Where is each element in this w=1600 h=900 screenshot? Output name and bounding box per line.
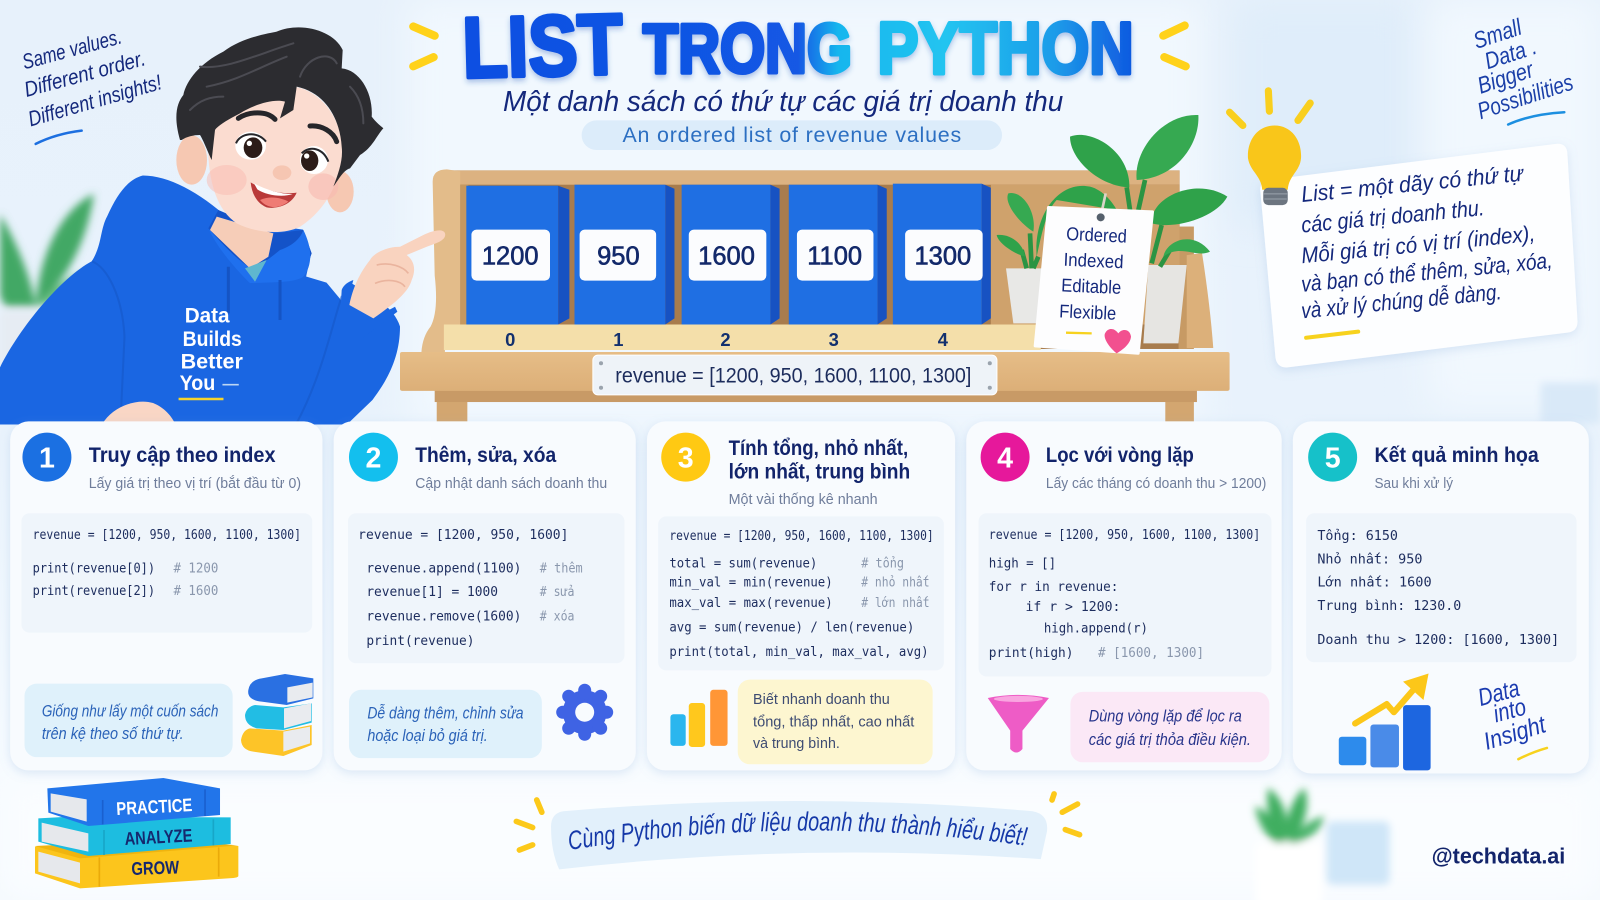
panel 5: example result — [1293, 421, 1589, 773]
panel 4: filter with loop — [966, 421, 1282, 770]
book: grow: GROW — [131, 856, 180, 879]
code block 2: revenue = [1200, 950, 1600] — [358, 528, 568, 543]
slogan banner: Cùng Python biến dữ liệu doanh thu thành hiểu biết! — [569, 811, 1028, 850]
subheading 1: Lấy giá trị theo vị trí (bắt đầu từ 0) — [89, 475, 301, 492]
callout 4: Dùng vòng lặp để lọc ra — [1089, 707, 1242, 725]
code block 4: revenue = [1200, 950, 1600, 1100, 1300] — [989, 528, 1260, 543]
note card: Mỗi giá trị có vị trí (index), — [1300, 221, 1536, 268]
book index 1: 950 — [597, 242, 640, 270]
subtitle english pill — [582, 120, 1002, 150]
callout 3: và trung bình. — [753, 736, 840, 752]
hoodie text: Data — [185, 303, 231, 327]
code block 2: # thêm — [540, 560, 583, 576]
code block 2: revenue[1] = 1000 — [366, 585, 498, 600]
badge 2: 2 — [366, 442, 381, 474]
title sparks — [413, 26, 1186, 66]
handle: @techdata.ai — [1432, 843, 1565, 868]
badge 5 — [1308, 433, 1357, 482]
head and hair drawn at zoom scale — [176, 27, 445, 340]
title — [461, 0, 1134, 97]
code block 4: if r > 1200: — [1026, 600, 1120, 615]
callout 2 — [349, 690, 542, 758]
callout 2: Dễ dàng thêm, chỉnh sửa — [367, 703, 523, 722]
book: analyze: ANALYZE — [124, 824, 193, 849]
badge 2 — [349, 433, 398, 482]
panel 3: statistics — [647, 421, 955, 770]
result block: Lớn nhất: 1600 — [1317, 575, 1432, 591]
code block 3 — [658, 516, 944, 670]
book index 0: 1200 — [482, 242, 539, 270]
callout 4 — [1070, 692, 1269, 762]
hoodie text — [179, 303, 243, 399]
heading 3 — [729, 436, 910, 484]
note: same values: Same values. — [20, 25, 124, 74]
badge 1 — [22, 433, 71, 482]
code block 1: # 1600 — [173, 584, 218, 599]
book: practice: PRACTICE — [116, 794, 193, 819]
lower hand — [102, 402, 176, 424]
character: boy in blue hoodie — [0, 27, 445, 424]
badge 3 — [661, 433, 710, 482]
callout 1 — [24, 684, 233, 757]
icon: colored bars — [670, 690, 728, 747]
book index 4: 1300 — [914, 242, 971, 270]
book index 0 — [466, 186, 569, 350]
subheading 4: Lấy các tháng có doanh thu > 1200) — [1046, 476, 1266, 492]
code block 1: # 1200 — [173, 561, 218, 576]
book index 1 — [574, 185, 674, 350]
hanging tag — [1035, 193, 1153, 353]
callout 1: Giống như lấy một cuốn sách — [42, 702, 218, 720]
result block: Nhỏ nhất: 950 — [1317, 551, 1422, 567]
code block 3: # nhỏ nhất — [861, 575, 930, 591]
hanging tag: Indexed — [1063, 249, 1124, 272]
book index 3: 3 — [829, 329, 839, 350]
code block 2: revenue.append(1100) — [366, 561, 521, 576]
badge 4: 4 — [997, 442, 1013, 474]
panel 2: add update delete — [334, 421, 636, 770]
subheading 2: Cập nhật danh sách doanh thu — [415, 476, 607, 492]
heading 4: Lọc với vòng lặp — [1046, 443, 1194, 467]
result block: Tổng: 6150 — [1317, 528, 1398, 544]
note card: và bạn có thể thêm, sửa, xóa, — [1300, 248, 1553, 297]
practice analyze grow books — [35, 778, 238, 888]
title: TRONG — [643, 9, 852, 87]
heading 1: Truy cập theo index — [89, 443, 276, 467]
result block — [1306, 513, 1577, 662]
callout 3: Biết nhanh doanh thu — [753, 692, 890, 708]
hoodie text: Better — [181, 349, 243, 373]
icon: light bulb — [1230, 91, 1310, 205]
code plate: revenue = [1200, 950, 1600, 1100, 1300] — [615, 365, 971, 388]
book index 3 — [789, 185, 887, 350]
icon: stacked books — [241, 674, 313, 756]
code block 1: revenue = [1200, 950, 1600, 1100, 1300] — [33, 528, 301, 543]
note: small data: Bigger — [1474, 56, 1537, 99]
note: data into insight — [1475, 675, 1550, 759]
heading 3: Tính tổng, nhỏ nhất, — [729, 436, 908, 460]
book: grow — [35, 844, 238, 888]
hoodie text: Builds — [183, 327, 242, 351]
hoodie text: You — [180, 371, 215, 395]
sleeve cuff — [340, 280, 397, 340]
note card — [1260, 144, 1578, 367]
callout 2: hoặc loại bỏ giá trị. — [367, 727, 488, 745]
book index 4: 4 — [938, 329, 949, 350]
note: data into insight: Insight — [1481, 711, 1550, 756]
note: data into insight: Data — [1475, 675, 1523, 712]
code block 3: avg = sum(revenue) / len(revenue) — [669, 621, 914, 636]
note card: và xử lý chúng dễ dàng. — [1300, 279, 1503, 323]
pointing hand — [349, 230, 445, 318]
note: small data: Possibilities — [1474, 69, 1576, 124]
badge 3: 3 — [678, 442, 694, 474]
note: small data: Data . — [1481, 33, 1540, 74]
callout 4: các giá trị thỏa điều kiện. — [1089, 731, 1251, 749]
code block 1: print(revenue[2]) — [33, 584, 155, 599]
subheading 5: Sau khi xử lý — [1374, 476, 1454, 492]
code block 4: # [1600, 1300] — [1098, 646, 1204, 661]
code block 3: # lớn nhất — [861, 595, 930, 611]
icon: growth chart — [1339, 673, 1431, 770]
badge 1: 1 — [39, 442, 55, 474]
code block 3: min_val = min(revenue) — [669, 576, 833, 591]
code block 2: revenue.remove(1600) — [366, 609, 521, 624]
code block 3: max_val = max(revenue) — [669, 596, 833, 611]
code block 1 — [21, 513, 312, 633]
blurred plant bottom right — [1255, 788, 1390, 900]
code block 2: # xóa — [540, 608, 574, 624]
badge 4 — [981, 433, 1030, 482]
code block 4 — [979, 513, 1271, 677]
note: data into insight: into — [1490, 694, 1529, 728]
hanging tag: Flexible — [1059, 300, 1117, 324]
wooden shelf — [400, 169, 1230, 421]
result block: Trung bình: 1230.0 — [1317, 598, 1461, 614]
result block: Doanh thu > 1200: [1600, 1300] — [1317, 633, 1559, 648]
code block 4: for r in revenue: — [989, 580, 1118, 595]
book index 2: 1600 — [698, 242, 755, 270]
code block 1: print(revenue[0]) — [33, 561, 155, 576]
code block 2 — [348, 513, 624, 663]
subheading 3: Một vài thống kê nhanh — [729, 492, 878, 508]
plant and pots — [997, 115, 1227, 343]
code plate — [593, 355, 997, 395]
callout 3: tổng, thấp nhất, cao nhất — [753, 715, 914, 731]
note: small data — [1470, 14, 1576, 124]
badge 5: 5 — [1325, 442, 1341, 474]
code block 3: total = sum(revenue) — [669, 556, 817, 571]
note card: các giá trị doanh thu. — [1300, 195, 1485, 238]
note: same values: Different insights! — [25, 70, 164, 131]
book: analyze — [38, 817, 231, 856]
book: practice — [47, 778, 220, 826]
book index 0: 0 — [505, 329, 515, 350]
code block 3: # tổng — [861, 555, 904, 571]
subtitle english pill: An ordered list of revenue values — [622, 123, 961, 147]
book index 1: 1 — [613, 329, 623, 350]
code block 4: high.append(r) — [1044, 622, 1148, 637]
code block 4: print(high) — [989, 646, 1073, 661]
icon: gear — [563, 690, 607, 734]
hoodie body — [0, 176, 400, 424]
list value books — [466, 184, 991, 350]
note: same values — [20, 25, 164, 144]
code block 3: revenue = [1200, 950, 1600, 1100, 1300] — [669, 529, 934, 544]
book index 3: 1100 — [807, 242, 862, 270]
icon: funnel — [988, 695, 1049, 753]
book index 2 — [682, 185, 780, 350]
callout 1: trên kệ theo số thứ tự. — [42, 725, 184, 743]
heading 2: Thêm, sửa, xóa — [415, 443, 557, 467]
book index 4 — [893, 184, 991, 350]
hanging tag: Editable — [1061, 274, 1122, 298]
book index 2: 2 — [720, 329, 731, 350]
slogan sparks — [516, 794, 1080, 850]
slogan banner — [551, 801, 1047, 870]
panel 1: access by index — [10, 421, 322, 770]
note: same values: Different order. — [22, 46, 148, 102]
icon: heart — [1105, 329, 1131, 353]
blurred plant left — [0, 194, 94, 383]
title: PYTHON — [878, 6, 1134, 89]
code block 2: print(revenue) — [366, 634, 474, 649]
heading 3: lớn nhất, trung bình — [729, 460, 910, 484]
code block 2: # sửa — [540, 584, 574, 600]
heading 5: Kết quả minh họa — [1374, 443, 1540, 467]
hanging tag: Ordered — [1066, 223, 1127, 247]
note: small data: Small — [1470, 14, 1525, 54]
note card: List = một dãy có thứ tự — [1300, 161, 1526, 207]
subtitle: Một danh sách có thứ tự các giá trị doanh thu — [503, 86, 1063, 118]
callout 3 — [738, 680, 933, 764]
code block 3: print(total, min_val, max_val, avg) — [669, 645, 929, 660]
code block 4: high = [] — [989, 556, 1056, 571]
